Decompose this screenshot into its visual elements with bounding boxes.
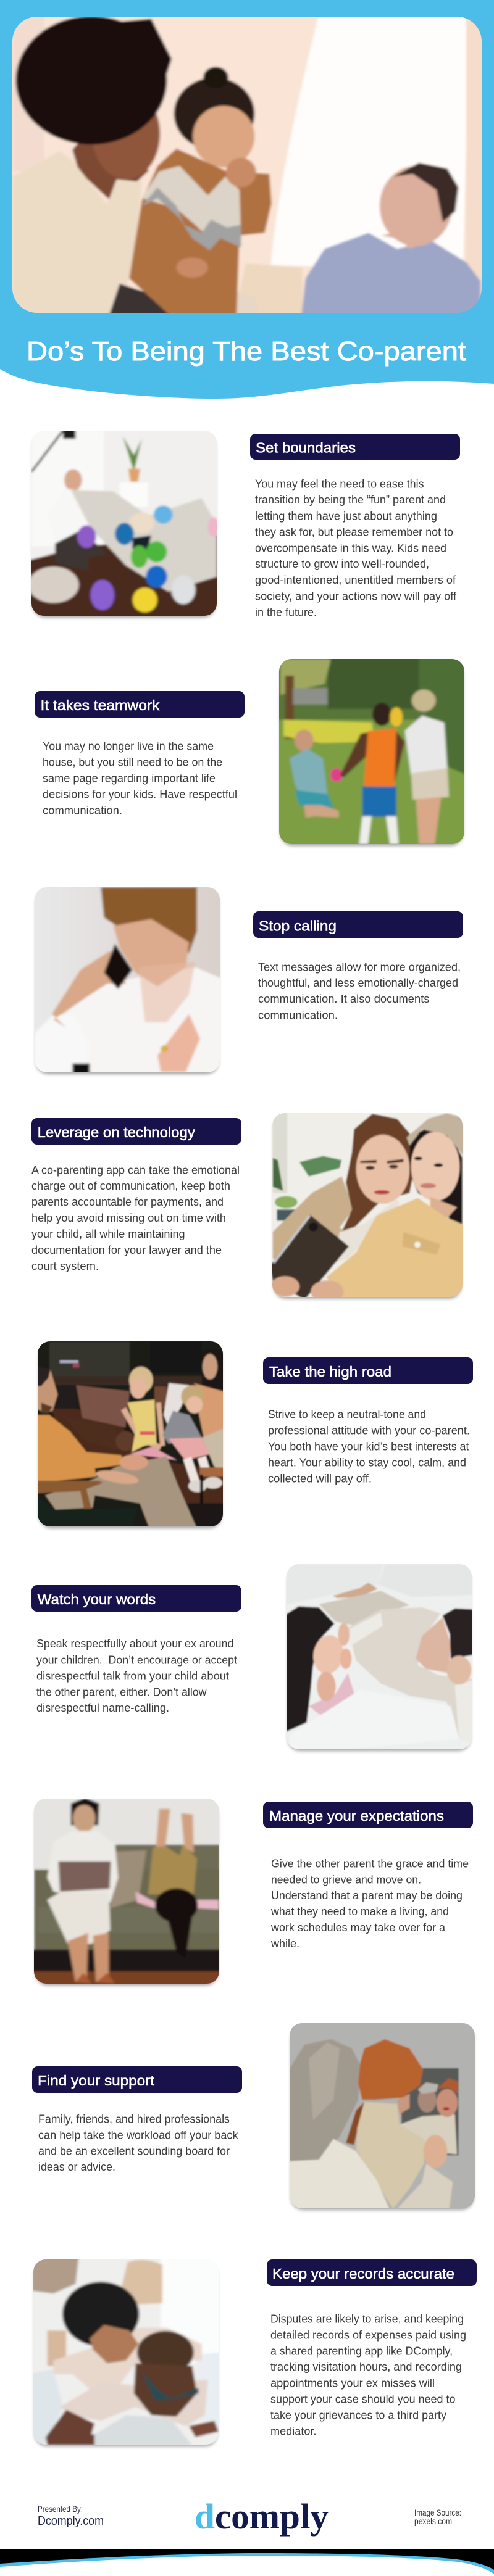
heading: Stop calling xyxy=(259,918,337,934)
body text: help you avoid missing out on time with xyxy=(31,1212,226,1224)
body text: your children. Don’t encourage or accept xyxy=(36,1654,237,1666)
panel: leverage on technology xyxy=(31,1111,471,1304)
body text: ideas or advice. xyxy=(38,2161,115,2173)
heading xyxy=(35,691,245,718)
body text: decisions for your kids. Have respectful xyxy=(43,788,237,800)
body text: needed to grieve and move on. xyxy=(271,1873,421,1886)
body text: professional attitude with your co-parent. xyxy=(268,1425,470,1437)
header background wave xyxy=(0,0,494,399)
body text: take your grievances to a third party xyxy=(270,2409,446,2422)
heading: Take the high road xyxy=(269,1364,391,1380)
footer: image source xyxy=(414,2508,461,2526)
body text: in the future. xyxy=(255,606,317,618)
body text: communication. xyxy=(258,1009,338,1021)
body text: Disputes are likely to arise, and keeping xyxy=(270,2313,464,2325)
body text: your child, all while maintaining xyxy=(31,1228,185,1240)
heading xyxy=(32,2066,242,2093)
body text: You may feel the need to ease this xyxy=(255,478,424,490)
body text: disrespectful name-calling. xyxy=(36,1702,169,1714)
body text xyxy=(270,2313,466,2437)
body text: good-intentioned, unentitled members of xyxy=(255,574,456,586)
body text: Understand that a parent may be doing xyxy=(271,1889,463,1902)
body text: Text messages allow for more organized, xyxy=(258,961,461,973)
title: Do’s To Being The Best Co-parent xyxy=(27,336,466,367)
body text: You may no longer live in the same xyxy=(43,740,214,752)
footer: bottom wave band xyxy=(0,2549,494,2576)
body text: documentation for your lawyer and the xyxy=(31,1244,222,1256)
heading xyxy=(267,2259,477,2286)
body text: what they need to make a living, and xyxy=(270,1905,449,1918)
body text: structure to grow into well-rounded, xyxy=(255,558,429,570)
body text: detailed records of expenses paid using xyxy=(270,2329,466,2341)
photo: mother and daughter taking a selfie xyxy=(272,1113,463,1297)
body text: support your case should you need to xyxy=(270,2393,456,2405)
heading xyxy=(253,911,463,938)
body text: can help take the workload off your back xyxy=(38,2129,238,2142)
body text: court system. xyxy=(31,1260,99,1272)
body text: the other parent, either. Don’t allow xyxy=(36,1686,207,1698)
body text: charge out of communication, keep both xyxy=(31,1180,230,1192)
body text: Family, friends, and hired professionals xyxy=(38,2113,230,2125)
photo: father with child on his back xyxy=(33,2259,219,2445)
heading: Find your support xyxy=(38,2073,155,2089)
body text: society, and your actions now will pay off xyxy=(255,590,457,602)
panel: keep your records accurate xyxy=(25,2254,477,2451)
photo: family playing catch in a park xyxy=(279,659,464,844)
body text: Strive to keep a neutral-tone and xyxy=(268,1408,426,1420)
hero photo: family with toddler xyxy=(12,17,482,313)
photo: two women looking in a mirror xyxy=(290,2023,475,2208)
panel: set boundaries xyxy=(31,431,460,619)
heading xyxy=(263,1357,473,1384)
body text: A co-parenting app can take the emotional xyxy=(31,1164,240,1176)
heading: Keep your records accurate xyxy=(272,2266,454,2282)
photo: mother on laptop beside child upside down on sofa xyxy=(34,1799,219,1984)
body text xyxy=(255,478,457,618)
panel: it takes teamwork xyxy=(35,651,472,855)
body text: house, but you still need to be on the xyxy=(43,756,222,769)
heading xyxy=(250,434,460,460)
body text: work schedules may take over for a xyxy=(270,1921,446,1934)
body text: while. xyxy=(270,1937,299,1950)
footer: image source: pexels.com xyxy=(414,2516,452,2526)
body text: transition by being the “fun” parent and xyxy=(255,494,446,506)
body text: overcompensate in this way. Kids need xyxy=(255,542,446,554)
body text: mediator. xyxy=(270,2425,316,2437)
body text: they ask for, but please remember not to xyxy=(255,526,453,538)
heading: Watch your words xyxy=(38,1591,156,1607)
heading: Leverage on technology xyxy=(38,1124,195,1140)
body text: letting them have just about anything xyxy=(255,510,437,522)
body text: a shared parenting app like DComply, xyxy=(270,2345,453,2357)
footer: image source: Image Source: xyxy=(414,2508,461,2517)
body text xyxy=(258,961,461,1021)
body text: communication. xyxy=(43,804,122,816)
body text: and be an excellent sounding board for xyxy=(38,2145,230,2157)
body text: disrespectful talk from your child about xyxy=(36,1670,229,1682)
body text: same page regarding important life xyxy=(43,772,216,785)
heading xyxy=(31,1118,241,1145)
body text: Speak respectfully about your ex around xyxy=(36,1638,233,1650)
body text: collected will pay off. xyxy=(268,1472,372,1485)
body text xyxy=(36,1638,237,1714)
footer: presented by: Dcomply.com xyxy=(38,2514,104,2528)
body text: heart. Your ability to stay cool, calm, and xyxy=(268,1456,466,1468)
footer: presented by xyxy=(38,2504,104,2528)
body text xyxy=(43,740,237,816)
heading: Manage your expectations xyxy=(269,1808,444,1824)
body text xyxy=(268,1408,470,1485)
body text: tracking visitation hours, and recording xyxy=(270,2361,462,2373)
photo: dad building blanket fort with balloons xyxy=(31,431,217,616)
photo: family on a leather sofa xyxy=(38,1341,223,1526)
panel: watch your words xyxy=(31,1558,484,1755)
body text: appointments your ex misses will xyxy=(270,2377,435,2389)
photo: woman on the phone xyxy=(35,887,220,1072)
body text: thoughtful, and less emotionally-charged xyxy=(258,977,458,989)
body text xyxy=(270,1857,469,1950)
footer: dcomply logo: dcomply xyxy=(195,2496,329,2537)
body text xyxy=(38,2113,238,2173)
heading: It takes teamwork xyxy=(41,697,160,713)
body text: Give the other parent the grace and time xyxy=(271,1857,469,1870)
panel: take the high road xyxy=(25,1339,473,1532)
heading xyxy=(263,1802,473,1828)
body text: communication. It also documents xyxy=(258,993,430,1005)
body text: parents accountable for payments, and xyxy=(31,1196,224,1208)
panel: manage your expectations xyxy=(28,1792,473,1990)
body text: You both have your kid’s best interests at xyxy=(268,1440,469,1452)
heading xyxy=(31,1585,241,1612)
body text xyxy=(31,1164,240,1272)
heading: Set boundaries xyxy=(256,440,356,456)
photo: mother and daughter on a bed xyxy=(287,1564,472,1749)
panel: stop calling xyxy=(28,882,463,1077)
footer: presented by: Presented By: xyxy=(38,2504,83,2514)
panel: find your support xyxy=(32,2018,484,2215)
